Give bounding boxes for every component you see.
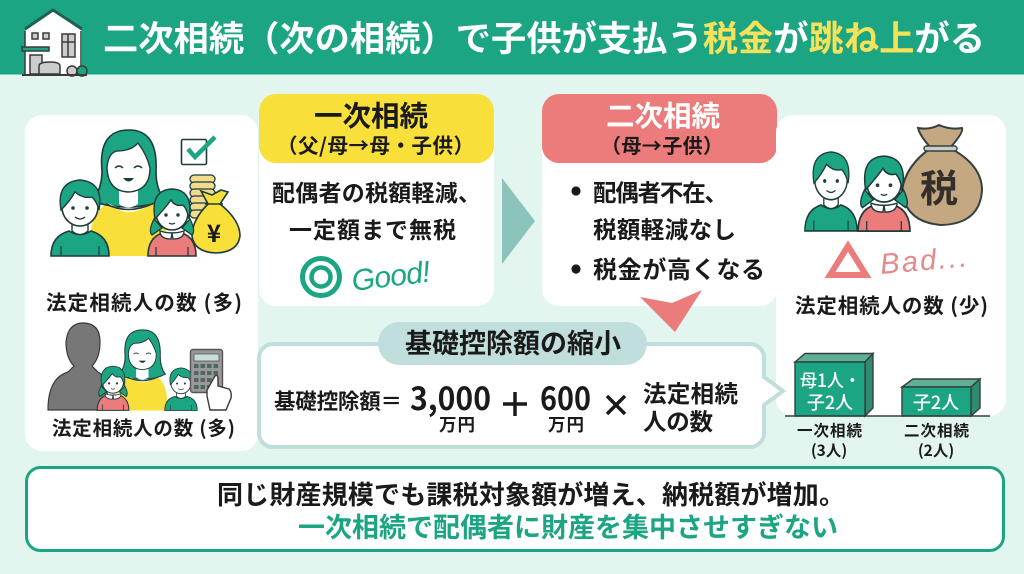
label: first inheritance heirs: 一次相続	[797, 419, 862, 441]
text: spouse deduction: 配偶者の税額軽減、	[272, 174, 481, 208]
icon: calculator and hand	[190, 350, 231, 410]
heading: second inheritance	[542, 94, 777, 163]
panel: basic deduction callout	[259, 322, 783, 447]
panel: first inheritance	[259, 94, 494, 306]
illustration: girl	[858, 156, 910, 231]
icon: double circle	[302, 258, 340, 296]
illustration: girl	[148, 189, 196, 256]
text: conclusion line 1: 同じ財産規模でも課税対象額が増え、納税額が増加。	[217, 475, 845, 512]
bar: second inheritance	[902, 379, 980, 416]
title: 二次相続（次の相続）で子供が支払う税金が跳ね上がる	[103, 11, 985, 62]
text: good: Good!	[350, 255, 433, 298]
panel: right children	[776, 115, 1006, 416]
text: second inheritance bullets: 税額軽減なし	[593, 211, 736, 245]
text: second inheritance bullets: 税金が高くなる	[593, 250, 765, 285]
arrow: chevron down	[640, 290, 702, 332]
icon: tax bag	[902, 125, 982, 225]
label: first inheritance heirs: (3人)	[811, 439, 847, 461]
formula: 600	[540, 374, 591, 420]
label: heirs many (upper): 法定相続人の数 (多)	[46, 286, 242, 316]
heading pill: 基礎控除額の縮小	[405, 322, 621, 361]
chart: heirs comparison blocks	[785, 354, 990, 461]
baseline	[785, 415, 990, 417]
arrow: first to second	[502, 178, 535, 264]
label: second inheritance heirs: (2人)	[918, 439, 954, 461]
label: second inheritance heirs: 二次相続	[904, 419, 969, 441]
heading: second inheritance: （母→子供）	[601, 130, 723, 159]
bar: first inheritance	[795, 354, 873, 416]
heading: first inheritance	[259, 94, 494, 163]
heading: second inheritance: 二次相続	[606, 94, 720, 135]
illustration: silhouette father	[48, 323, 108, 410]
formula: 万円	[548, 412, 584, 437]
label: heirs many (lower): 法定相続人の数 (多)	[52, 412, 235, 441]
label: first inheritance heirs	[797, 419, 862, 461]
icon: tax bag: 税	[920, 158, 958, 213]
formula: 万円	[439, 412, 475, 437]
panel: second inheritance	[542, 94, 777, 306]
text: spouse deduction: 一定額まで無税	[289, 211, 456, 245]
panel: conclusion	[26, 468, 1004, 550]
icon: triangle	[830, 246, 866, 275]
formula	[274, 374, 738, 437]
icon: house	[22, 10, 87, 76]
label: heirs few: 法定相続人の数 (少)	[795, 289, 988, 319]
illustration: boy	[805, 152, 857, 231]
heading: first inheritance: 一次相続	[314, 94, 428, 135]
illustration: small boy	[165, 368, 197, 410]
illustration: boy	[51, 180, 109, 256]
icon: checkbox	[182, 137, 215, 164]
text: conclusion line 2: 一次相続で配偶者に財産を集中させすぎない	[298, 506, 838, 545]
illustration: mother	[89, 130, 167, 256]
bar: second inheritance: 子2人	[913, 389, 959, 415]
header band	[0, 0, 1024, 74]
bar: first inheritance: 子2人	[807, 389, 853, 415]
text: second inheritance bullets: 配偶者不在、	[593, 174, 728, 208]
formula: 基礎控除額＝	[274, 385, 402, 416]
bar: first inheritance: 母1人・	[800, 367, 861, 393]
formula: 3,000	[410, 374, 491, 420]
text: second inheritance bullets	[571, 174, 765, 285]
text: spouse deduction	[272, 174, 481, 245]
icon: coins and yen bag: ¥	[207, 214, 221, 249]
illustration: small girl	[97, 366, 129, 410]
panel: left family	[25, 115, 258, 451]
label: second inheritance heirs	[904, 419, 969, 461]
formula: 人の数	[643, 403, 714, 437]
icon: coins and yen bag	[190, 175, 240, 253]
illustration: small mother	[117, 330, 167, 411]
formula: 法定相続	[643, 375, 738, 409]
text: bad: Bad...	[879, 242, 968, 281]
heading: first inheritance: （父/母→母・子供）	[277, 129, 474, 159]
